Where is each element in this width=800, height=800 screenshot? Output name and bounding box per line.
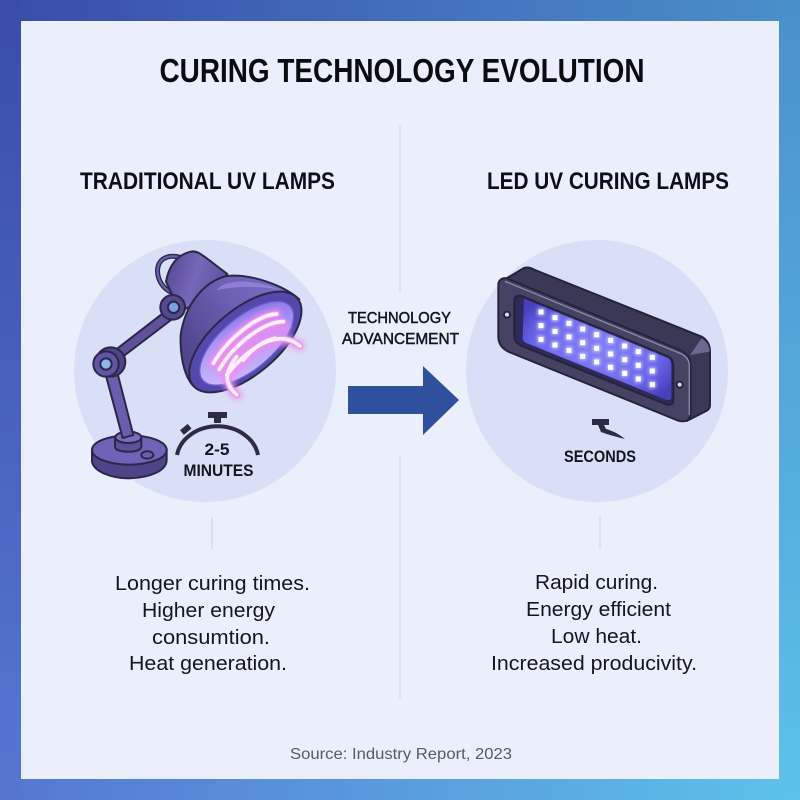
icon: desk lamp	[92, 251, 318, 478]
connector	[211, 517, 213, 549]
housing highlight	[690, 338, 710, 355]
glowing coil	[213, 314, 300, 395]
lamp rim and inside	[172, 273, 318, 411]
text block: LED lamp benefits	[491, 572, 697, 675]
shade highlight	[217, 281, 280, 290]
lamp lower arm	[105, 370, 133, 438]
inner recess	[514, 296, 673, 405]
label: technology advancement: TECHNOLOGY	[348, 310, 451, 327]
panel: traditional UV lamps	[74, 168, 336, 675]
lamp shoulder joint	[160, 295, 185, 320]
circle backdrop	[466, 240, 728, 502]
text block: LED lamp benefits: Energy efficient	[526, 599, 671, 621]
icon: stopwatch	[177, 412, 258, 455]
housing body	[498, 267, 710, 421]
label: technology advancement	[342, 310, 459, 348]
arrow	[348, 366, 459, 435]
center divider	[399, 126, 401, 698]
icon: stopwatch fragment	[592, 419, 625, 439]
lamp handle	[158, 256, 180, 292]
lamp neck	[166, 251, 227, 312]
heading: LED UV curing lamps: LED UV CURING LAMPS	[487, 168, 729, 195]
lamp base	[92, 432, 167, 478]
text block: traditional lamp drawbacks	[115, 573, 310, 675]
time label: 2-5 minutes: 2-5	[204, 440, 230, 459]
panel: LED UV curing lamps	[466, 168, 729, 675]
text block: traditional lamp drawbacks: Higher energy	[142, 600, 275, 622]
LED dots	[541, 312, 652, 385]
lamp elbow joint	[93, 347, 125, 377]
label: technology advancement: ADVANCEMENT	[342, 331, 459, 348]
text block: LED lamp benefits: Rapid curing.	[535, 572, 658, 594]
connector	[599, 517, 601, 549]
text block: traditional lamp drawbacks: Longer curing times.	[115, 573, 310, 595]
text block: traditional lamp drawbacks: Heat generation.	[129, 653, 287, 675]
heading: traditional UV lamps: TRADITIONAL UV LAMPS	[80, 168, 335, 195]
screw left	[504, 312, 510, 318]
text block: LED lamp benefits: Low heat.	[551, 626, 642, 648]
source: Source: Industry Report, 2023	[290, 746, 512, 763]
lamp upper arm	[113, 312, 171, 359]
title: CURING TECHNOLOGY EVOLUTION	[160, 52, 644, 89]
circle backdrop	[74, 240, 336, 502]
text block: traditional lamp drawbacks: consumtion.	[152, 627, 270, 649]
text block: LED lamp benefits: Increased producivity.	[491, 653, 697, 675]
time label: 2-5 minutes	[184, 440, 254, 480]
LED panel	[523, 299, 671, 400]
lamp shade	[181, 276, 299, 390]
screw right	[677, 382, 683, 388]
front frame	[498, 278, 691, 421]
time label: seconds: SECONDS	[564, 447, 636, 466]
icon: LED lamp bar	[498, 267, 710, 421]
time label: 2-5 minutes: MINUTES	[184, 461, 254, 480]
